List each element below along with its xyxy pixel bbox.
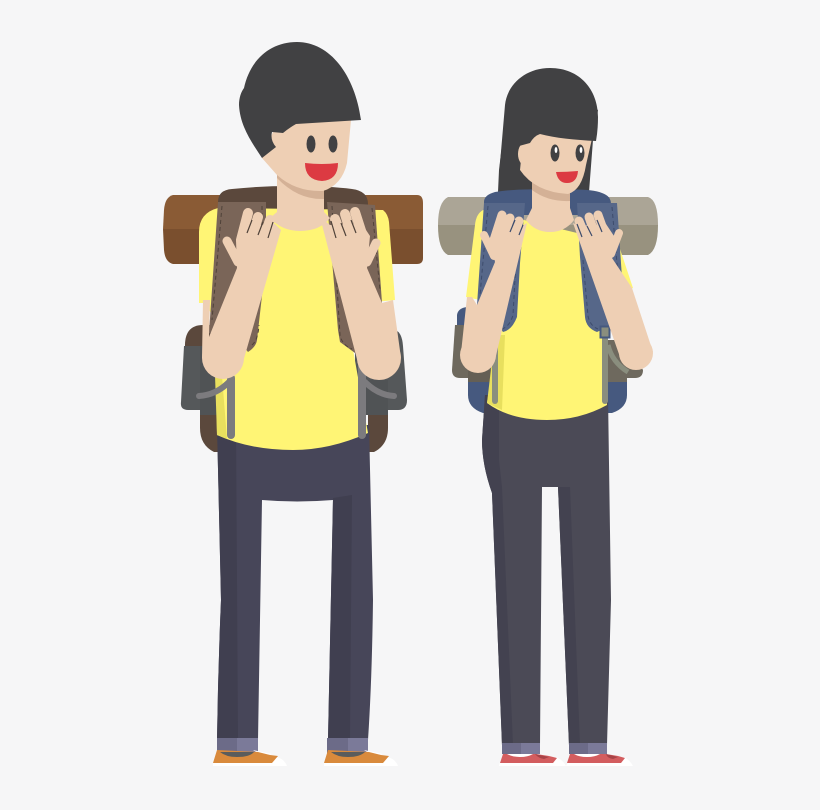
eyes — [306, 136, 338, 152]
t-shirt — [199, 208, 395, 450]
backpack body — [452, 189, 643, 413]
hair — [499, 68, 598, 175]
backpack straps — [477, 203, 622, 332]
grey waist straps — [199, 366, 394, 435]
shoe: left — [213, 750, 287, 766]
pants — [217, 425, 373, 740]
right arm and hand — [573, 215, 653, 370]
head — [499, 68, 598, 194]
neck — [526, 180, 574, 232]
face — [262, 120, 351, 191]
figure: man backpacker — [163, 42, 423, 766]
backpack straps — [209, 202, 382, 353]
cuff: right — [569, 743, 607, 754]
right arm and hand — [320, 212, 401, 380]
left arm and hand — [460, 215, 527, 373]
bedroll: grey — [438, 197, 658, 255]
shoe: right — [566, 754, 633, 766]
hair — [239, 42, 361, 158]
face — [520, 130, 594, 194]
cuff: left — [502, 743, 540, 754]
cuff: left — [217, 738, 258, 753]
mouth — [556, 171, 578, 183]
back hair — [498, 80, 598, 192]
shoe: left — [499, 754, 566, 766]
bedroll: brown — [163, 195, 423, 264]
neck — [270, 170, 330, 231]
left arm and hand — [202, 213, 281, 379]
figure: woman backpacker — [438, 68, 658, 766]
ear — [518, 142, 534, 166]
eyes — [550, 144, 584, 162]
pants — [482, 395, 611, 745]
shoe: right — [324, 750, 398, 766]
backpack body — [181, 186, 407, 452]
olive waist straps — [495, 326, 628, 401]
t-shirt — [466, 210, 633, 420]
head — [239, 42, 361, 191]
mouth — [305, 163, 338, 181]
cuff: right — [327, 738, 368, 753]
